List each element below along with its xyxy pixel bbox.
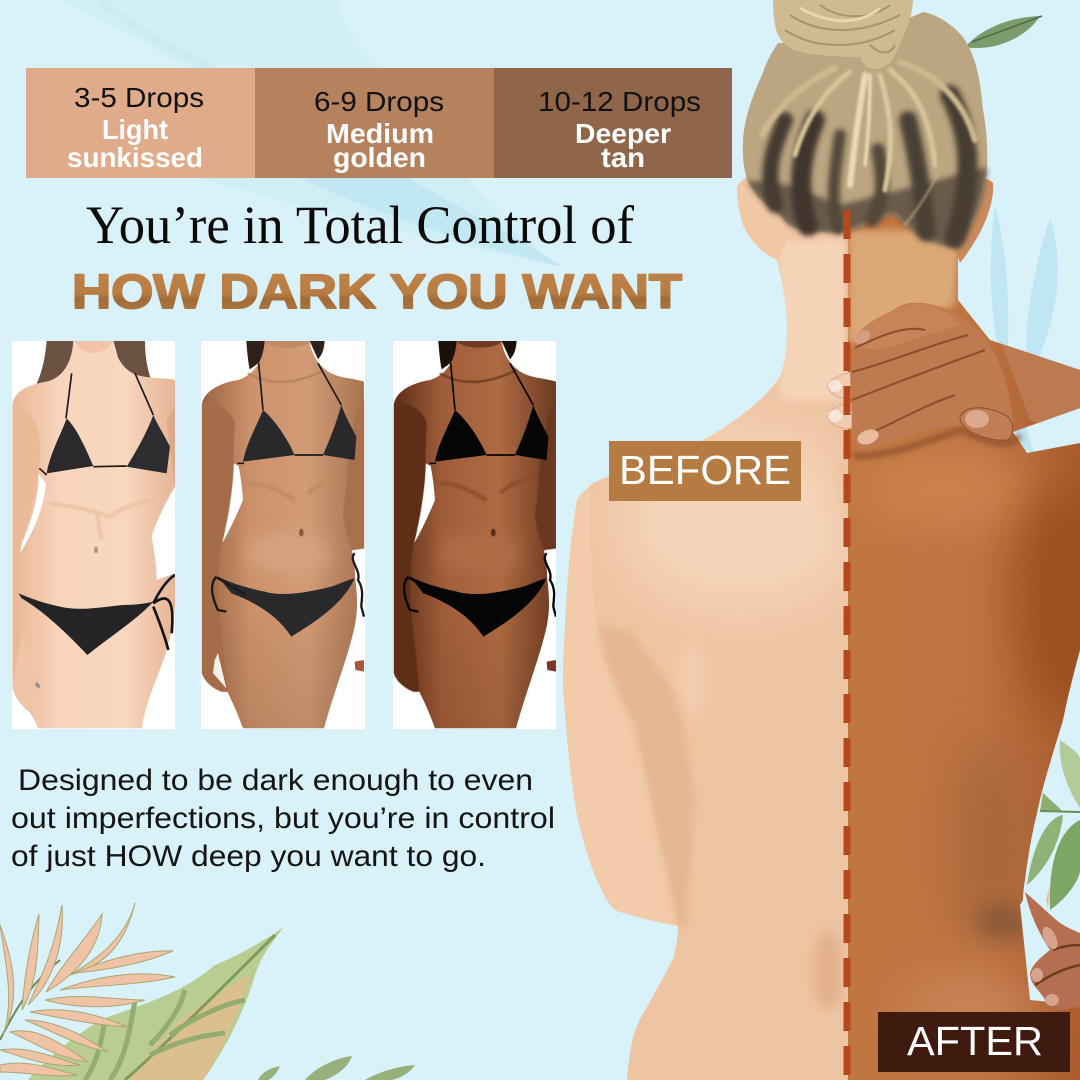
panel: deeper tan (494, 68, 732, 178)
label: after: AFTER (907, 1018, 1043, 1064)
panel: medium golden: Medium (326, 118, 434, 149)
heading: serif line: You’re in Total Control of (86, 195, 634, 255)
background leaf: top left translucent (60, 0, 563, 267)
panel: deeper tan: tan (601, 142, 645, 173)
body text: out imperfections, but you’re in control (11, 802, 555, 835)
panel: medium golden (255, 68, 494, 178)
photo: light tan figure (12, 341, 175, 729)
icon: palm frond bottom left (0, 903, 175, 1076)
ear: right (950, 175, 993, 263)
ear: left (737, 173, 790, 260)
body text: of just HOW deep you want to go. (11, 840, 486, 873)
label: before (609, 441, 801, 501)
panel: light sunkissed: 3-5 Drops (74, 82, 204, 113)
photo: deep tan figure (393, 341, 556, 729)
heading: gold line: HOW DARK YOU WANT (72, 266, 682, 319)
hand: lower right (1025, 892, 1080, 1010)
hair bun (773, 0, 913, 69)
panel: medium golden: 6-9 Drops (314, 86, 444, 117)
body text: Designed to be dark enough to even (18, 764, 533, 797)
icon: green leaf top right (965, 16, 1042, 48)
after half (848, 180, 1080, 1080)
label: after (878, 1012, 1070, 1072)
before half (563, 216, 848, 1080)
body text (11, 764, 555, 873)
photo: woman's back before and after (555, 0, 1080, 1080)
panel: light sunkissed (26, 68, 255, 178)
panel: light sunkissed: sunkissed (67, 142, 203, 173)
icon: large green leaf bottom left (28, 927, 284, 1080)
panel: medium golden: golden (333, 142, 426, 173)
hand (827, 303, 1020, 456)
background leaf: right translucent (991, 205, 1058, 455)
photo: medium tan figure (201, 341, 365, 729)
dashed divider: under hand (844, 210, 850, 1080)
back silhouette (555, 180, 1080, 1080)
label: before: BEFORE (619, 447, 791, 493)
panel: light sunkissed: Light (102, 114, 168, 145)
dashed divider: over hand (844, 342, 850, 431)
hair (743, 12, 987, 247)
drops table (26, 68, 732, 178)
panel: deeper tan: Deeper (575, 118, 671, 149)
icon: green leaves bottom right (1027, 740, 1080, 910)
panel: deeper tan: 10-12 Drops (538, 86, 701, 117)
icon: small green leaves bottom (258, 1056, 415, 1080)
